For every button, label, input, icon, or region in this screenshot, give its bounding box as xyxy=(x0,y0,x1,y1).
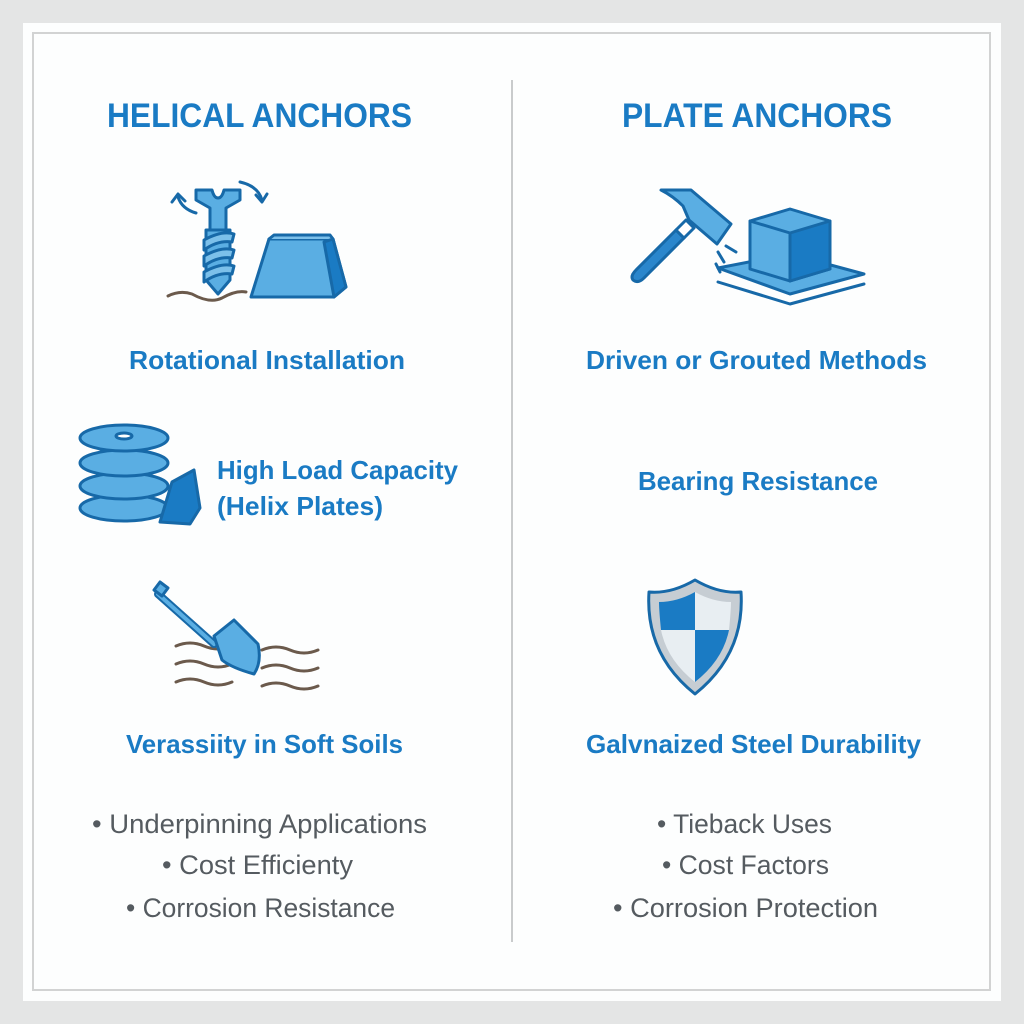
icon: shovel in soil xyxy=(154,582,318,689)
heading: bearing resistance: Bearing Resistance xyxy=(638,466,878,496)
bullet list: plate xyxy=(613,809,878,923)
bullet list: helical xyxy=(92,809,427,923)
icon: hammer hitting cube on plate xyxy=(632,190,864,304)
bullet list: helical: • Corrosion Resistance xyxy=(126,893,395,923)
bullet list: helical: • Cost Efficienty xyxy=(162,850,354,880)
heading: versatility in soft soils: Verassiity in Soft Soils xyxy=(126,729,403,759)
heading: galvanized steel durability: Galvnaized Steel Durability xyxy=(586,729,922,759)
title: helical anchors: HELICAL ANCHORS xyxy=(107,97,412,135)
heading: rotational installation: Rotational Installation xyxy=(129,345,405,375)
bullet list: plate: • Tieback Uses xyxy=(657,809,832,839)
icon: shield xyxy=(649,580,741,694)
title: plate anchors: PLATE ANCHORS xyxy=(622,97,892,135)
bullet list: plate: • Cost Factors xyxy=(662,850,829,880)
bullet list: helical: • Underpinning Applications xyxy=(92,809,427,839)
heading: driven or grouted methods: Driven or Grouted Methods xyxy=(586,345,927,375)
icon: screw with rotation arrows and block xyxy=(168,182,346,300)
icon: stacked helix plates xyxy=(80,425,200,524)
bullet list: plate: • Corrosion Protection xyxy=(613,893,878,923)
text: (Helix Plates) xyxy=(217,491,383,521)
heading: high load capacity: High Load Capacity xyxy=(217,455,459,485)
